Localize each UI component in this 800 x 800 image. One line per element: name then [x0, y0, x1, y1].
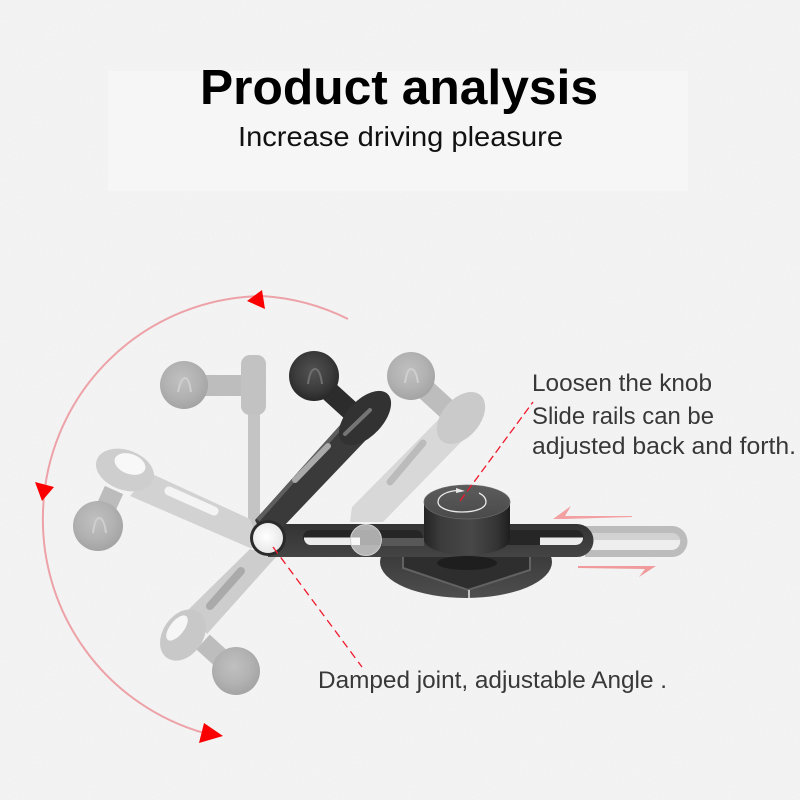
knob top: [424, 485, 510, 519]
damped joint: [250, 520, 286, 556]
slot: [210, 571, 241, 606]
arm: [255, 423, 365, 535]
arrowhead: top: [247, 290, 265, 309]
stem: [104, 490, 114, 512]
stem: [203, 642, 225, 662]
head: [241, 355, 266, 415]
knob body: [424, 502, 510, 555]
ball: [289, 351, 339, 401]
ball: [387, 352, 435, 400]
base disc: [380, 526, 552, 598]
head: [151, 601, 215, 669]
stem: [203, 375, 245, 396]
ghost arm: upright: [160, 355, 266, 535]
ghost rail extension: [585, 526, 687, 557]
arrowhead: left: [35, 482, 54, 501]
ball: [160, 361, 208, 409]
eye: [112, 449, 148, 479]
dashed leader: knob: [460, 402, 533, 501]
slide arrow: right: [578, 566, 656, 577]
joint cap: [253, 523, 283, 553]
ball: [212, 647, 260, 695]
arm: [248, 410, 260, 535]
slot left opening: [304, 538, 360, 545]
knob collar: [437, 556, 497, 570]
dashed leader: joint: [273, 547, 362, 667]
subtitle: Increase driving pleasure: [238, 121, 563, 152]
head: [329, 382, 401, 454]
slot: [169, 491, 214, 511]
head: [90, 441, 160, 499]
knob ring: [438, 490, 486, 512]
title: Product analysis: [200, 61, 598, 115]
translucent pin: [350, 524, 382, 556]
head highlight: [345, 410, 370, 434]
arm: [188, 549, 276, 634]
slot right wall: [505, 530, 584, 545]
ghost arm: lower: [151, 549, 276, 695]
base slit: [468, 590, 470, 598]
ghost arm: right: [350, 352, 495, 522]
arm: [350, 418, 466, 522]
slot upper wall: [585, 533, 680, 542]
slot lower opening: [585, 540, 680, 550]
slot left wall: [303, 530, 423, 545]
title panel: [108, 71, 688, 191]
arc: [43, 296, 348, 733]
rail body: [268, 524, 594, 557]
ball highlight: [178, 378, 191, 392]
stem: [426, 390, 450, 412]
arrowhead: bottom: [199, 723, 223, 743]
knob ring arrow tip: [456, 488, 465, 493]
label line 3: adjusted back and forth.: [532, 433, 796, 460]
slot right opening: [540, 538, 583, 545]
rail: [585, 526, 687, 557]
slot: [295, 446, 328, 480]
ball: [73, 501, 123, 551]
hexagon nut: [403, 552, 530, 590]
ball highlight: [93, 518, 106, 533]
ball highlight: [405, 369, 418, 383]
eye: [162, 612, 192, 644]
rotation arc with arrowheads: [35, 290, 348, 743]
dark rail: [268, 524, 594, 557]
stem: [330, 392, 352, 412]
head: [427, 383, 495, 453]
slot left behind base: [382, 538, 424, 546]
knob: [424, 485, 510, 570]
ball highlight: [308, 369, 322, 384]
callout: knob: [532, 370, 796, 460]
joint ring: [250, 520, 286, 556]
callout: joint: Damped joint, adjustable Angle .: [318, 667, 667, 694]
arm: [130, 473, 262, 548]
slide arrow: left: [553, 506, 632, 519]
dark arm with ball: [255, 351, 401, 535]
mount base: [380, 526, 552, 598]
label line 2: Slide rails can be: [532, 403, 714, 430]
label line 1: Loosen the knob: [532, 370, 712, 397]
ghost arm: left: [73, 441, 262, 551]
slot: [390, 443, 423, 482]
arm highlight: [258, 426, 342, 520]
